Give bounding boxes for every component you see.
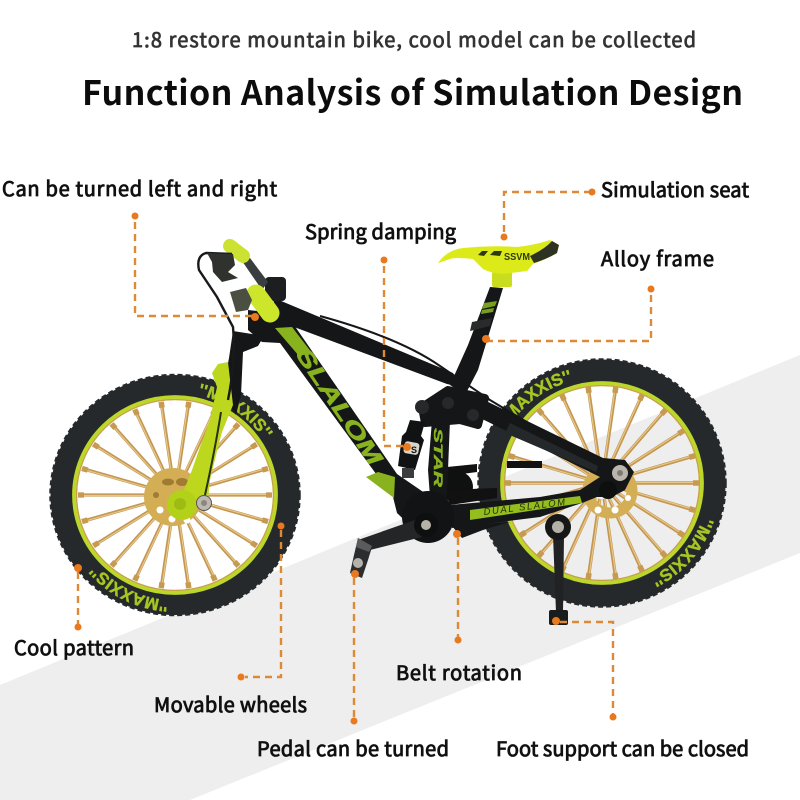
swingarm and chainstay	[450, 392, 634, 538]
kickstand	[545, 514, 571, 625]
callout: belt rotation	[396, 530, 522, 686]
callout: foot support: Foot support can be closed	[496, 733, 749, 762]
rear wheel: ''MAXXIS''	[655, 520, 714, 588]
callout: simulation seat	[500, 174, 749, 240]
belt drive and upper stay	[441, 461, 542, 505]
callout: foot support	[496, 617, 749, 762]
seat tube	[450, 287, 503, 395]
callout: simulation seat: Simulation seat	[601, 174, 749, 203]
title: Function Analysis of Simulation Design	[82, 66, 743, 115]
callout: turned left and right	[2, 173, 277, 321]
callout: alloy frame	[482, 243, 714, 343]
star link	[428, 420, 450, 505]
bottom bracket and crank	[350, 491, 454, 578]
saddle	[438, 240, 559, 287]
front wheel	[49, 374, 301, 616]
front wheel: ''MAXXIS''	[88, 570, 166, 612]
background diagonal band	[0, 355, 800, 800]
callout: cool pattern: Cool pattern	[14, 632, 134, 661]
callout: cool pattern	[14, 564, 134, 661]
shock absorber	[398, 420, 425, 478]
saddle: SSVM	[504, 252, 530, 263]
front wheel: ''MAXXIS''	[200, 384, 274, 435]
main frame: SLALOM	[291, 343, 388, 470]
rear wheel	[477, 358, 727, 608]
callout: alloy frame: Alloy frame	[601, 243, 714, 272]
callout: pedal can be turned: Pedal can be turned	[257, 733, 449, 762]
shock absorber: S	[411, 445, 417, 455]
suspension rocker link	[415, 390, 485, 425]
main frame	[248, 298, 540, 535]
callout: spring damping: Spring damping	[305, 216, 456, 245]
callout: movable wheels: Movable wheels	[154, 689, 307, 718]
fork	[167, 331, 264, 520]
callout: spring damping	[305, 216, 456, 451]
callout: pedal can be turned	[257, 570, 449, 762]
callout: turned left and right: Can be turned left and right	[2, 173, 277, 202]
swingarm and chainstay: DUAL SLALOM	[483, 497, 566, 518]
star link: STAR	[431, 428, 445, 488]
callout: movable wheels	[154, 522, 307, 718]
handlebar	[198, 246, 286, 400]
callout: belt rotation: Belt rotation	[396, 657, 522, 686]
bicycle model	[49, 239, 727, 625]
subtitle: 1:8 restore mountain bike, cool model can be collected	[132, 24, 696, 53]
rear wheel: ''MAXXIS''	[506, 370, 570, 416]
